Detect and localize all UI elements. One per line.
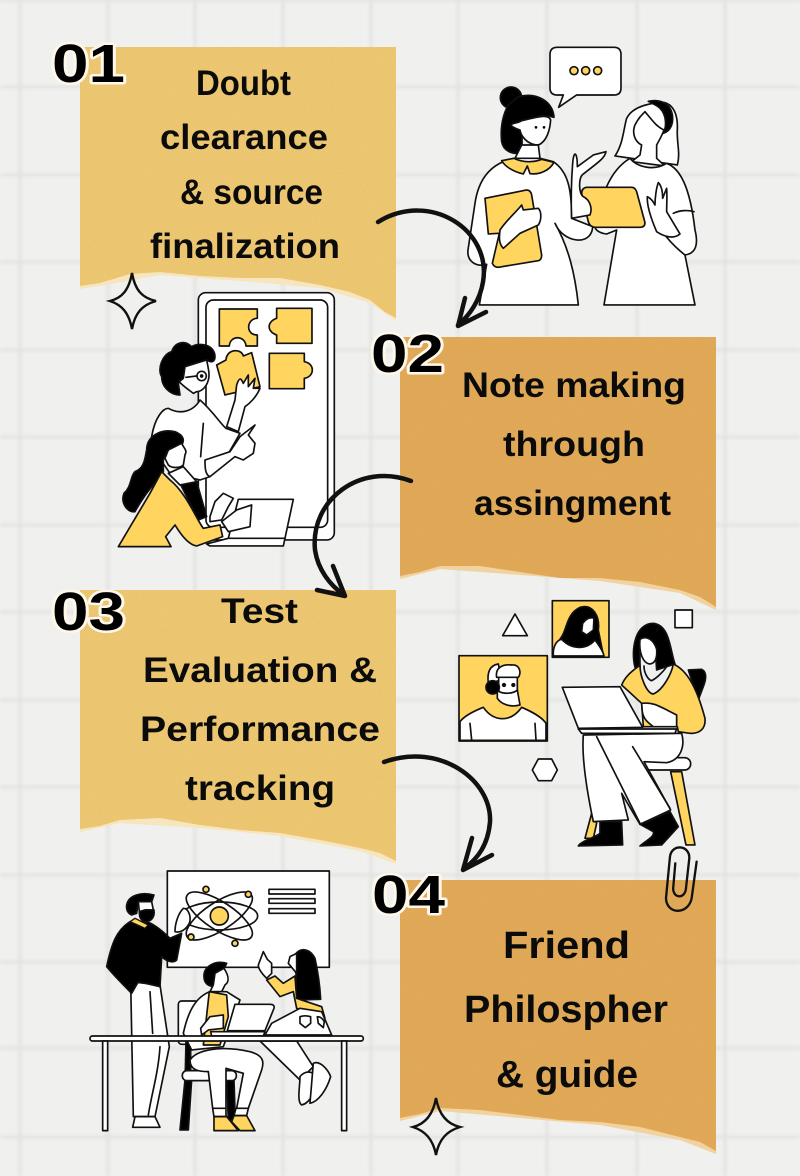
text: panel 1: & source <box>180 173 323 212</box>
text: panel 2: assingment <box>474 484 671 523</box>
arrow 2 <box>315 476 411 596</box>
illustration: two people solving puzzle on phone board <box>118 293 334 547</box>
illustration: team at table in front of atom board <box>90 871 363 1131</box>
table <box>90 1036 363 1131</box>
speech bubble <box>550 47 621 107</box>
text: panel 4: Friend <box>503 925 630 967</box>
text: panel 3 <box>140 592 380 808</box>
text: panel 2 <box>462 366 686 523</box>
arrow 3 <box>384 757 492 870</box>
right woman <box>595 101 696 305</box>
panel 4 <box>400 880 716 1154</box>
text: panel 1: Doubt <box>196 64 291 103</box>
text: panel 1: clearance <box>160 118 328 157</box>
sparkle 2 <box>413 1098 460 1155</box>
text: panel 3: Evaluation & <box>143 651 377 690</box>
text: panel 3: Test <box>221 592 298 631</box>
panel 1 <box>80 47 396 321</box>
paper clip <box>666 847 697 911</box>
left woman <box>468 87 606 305</box>
panel 2 <box>400 337 716 610</box>
text: panel 3: tracking <box>185 769 335 808</box>
seated man <box>183 962 263 1131</box>
step numbers: 03 <box>52 582 125 642</box>
step numbers: 02 <box>371 324 444 384</box>
text: panel 2: through <box>503 425 645 464</box>
raised hand woman <box>258 950 332 1105</box>
whiteboard with atom <box>167 871 329 967</box>
arrow 1 <box>378 211 486 326</box>
chair back and legs <box>585 669 706 845</box>
video tile: woman <box>552 601 609 657</box>
video tile: man with headset <box>459 656 547 741</box>
tablet right <box>582 187 645 227</box>
text: panel 4: & guide <box>496 1054 638 1096</box>
standing man <box>107 894 190 1127</box>
man with glasses <box>152 343 260 480</box>
hexagon <box>532 759 557 781</box>
woman at laptop <box>118 431 293 547</box>
step numbers <box>52 34 445 925</box>
text: panel 2: Note making <box>462 366 686 405</box>
text: panel 1 <box>150 64 340 266</box>
panel 3 <box>80 590 396 864</box>
triangle <box>503 614 527 636</box>
sparkle 1 <box>110 273 156 329</box>
seated woman <box>562 623 705 846</box>
step numbers: 04 <box>372 865 445 925</box>
illustration: two women with tablets and speech bubble <box>468 47 696 305</box>
square <box>675 610 692 628</box>
laptop on table <box>211 1004 274 1036</box>
phone board <box>198 293 334 540</box>
illustration: woman on video call with laptop <box>459 601 706 846</box>
text: panel 4 <box>464 925 668 1096</box>
step numbers: 01 <box>52 34 125 94</box>
text: panel 4: Philospher <box>464 989 668 1031</box>
puzzle pieces <box>217 308 312 395</box>
text: panel 3: Performance <box>140 710 380 749</box>
seated man chair <box>178 1001 236 1130</box>
text: panel 1: finalization <box>150 227 340 266</box>
